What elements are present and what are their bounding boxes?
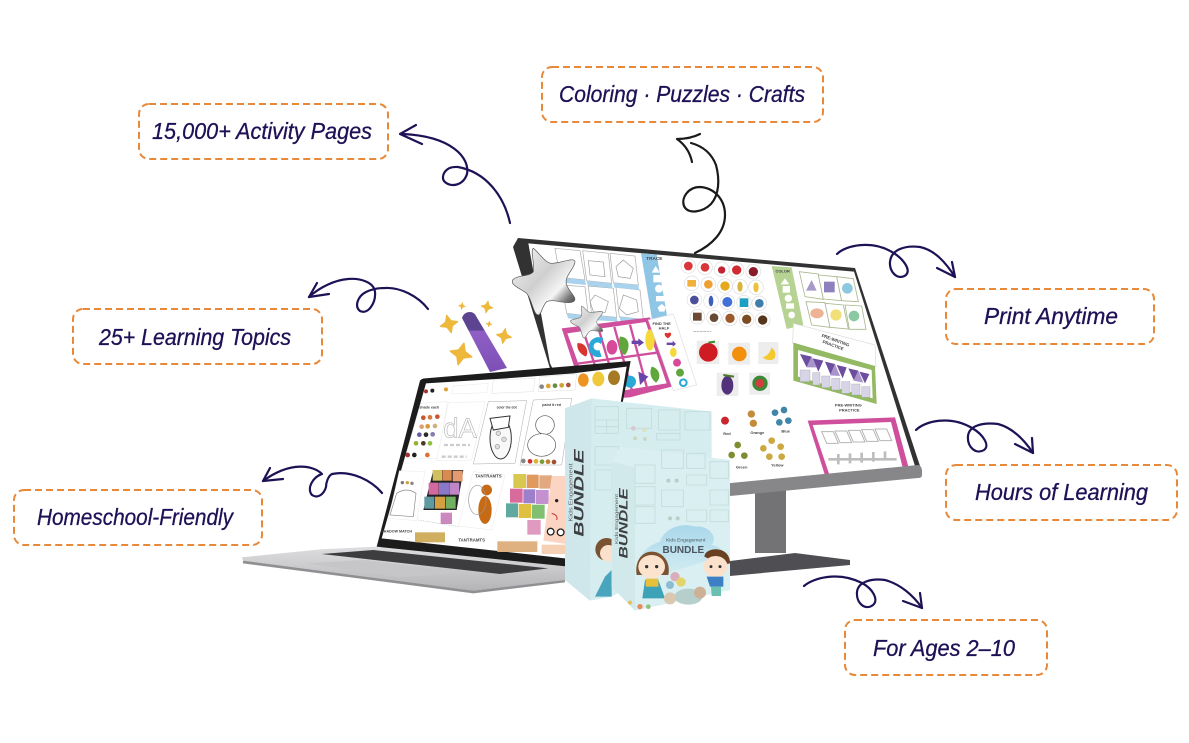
balloons and flowers xyxy=(628,572,706,609)
label: For Ages 2-10: For Ages 2–10 xyxy=(873,635,1015,661)
pre-writing practice sheet green: PRE-WRITING xyxy=(821,333,851,348)
cut-out fruit row xyxy=(693,332,778,396)
label: Print Anytime: Print Anytime xyxy=(984,303,1118,329)
label: 25+ Learning Topics xyxy=(73,309,322,364)
boy illustration xyxy=(704,549,730,596)
front box xyxy=(612,447,730,611)
label: Print Anytime xyxy=(946,289,1154,344)
label: 15,000+ Activity Pages: 15,000+ Activity Pages xyxy=(152,118,372,144)
laptop keyboard xyxy=(322,550,548,574)
monitor frame xyxy=(513,238,920,490)
find the half card: HALF xyxy=(659,325,670,330)
monitor xyxy=(513,238,922,576)
sticker circles xyxy=(681,259,770,327)
label: Coloring Puzzles Crafts: Coloring · Puzzles · Crafts xyxy=(559,81,805,107)
chrome star small xyxy=(571,306,603,338)
magic wand with sparkles xyxy=(438,300,513,372)
trace shapes strip xyxy=(641,253,668,327)
pink face worksheet xyxy=(543,476,568,544)
letter tracing worksheet: dA xyxy=(443,412,478,443)
label: Homeschool-Friendly xyxy=(14,490,262,545)
back box BUNDLE spine title: BUNDLE xyxy=(571,448,587,537)
pre-writing practice sheet pink: PRE-WRITING xyxy=(835,403,862,408)
bottom row worksheets: TANTRAMTS xyxy=(458,538,485,543)
teddy colouring worksheet xyxy=(458,472,505,530)
counting bugs with colour labels: Yellow xyxy=(771,463,784,468)
second faces grid worksheet xyxy=(506,474,552,535)
laptop lid xyxy=(377,361,631,567)
label: Coloring Puzzles Crafts xyxy=(542,67,823,122)
back box xyxy=(565,398,712,601)
label: 25+ Learning Topics: 25+ Learning Topics xyxy=(98,324,291,350)
shape tracing cards xyxy=(555,248,644,324)
cloud with bundle title: Kids Engagement xyxy=(666,538,706,544)
curly arrow to 25+ Learning Topics xyxy=(309,279,428,312)
laptop xyxy=(242,361,631,593)
color shape cards xyxy=(799,272,866,329)
bottom row worksheets: SHADOW MATCH xyxy=(381,530,412,534)
curly arrow to Print Anytime xyxy=(837,245,955,277)
curly arrow to 15,000+ Activity Pages xyxy=(400,125,510,223)
cloud with bundle title xyxy=(642,525,723,577)
bear colouring worksheet: paint it red xyxy=(542,403,561,407)
curly arrow to For Ages 2-10 xyxy=(804,577,922,608)
chrome star large xyxy=(512,248,575,315)
row of partial worksheets xyxy=(424,370,620,394)
teddy colouring worksheet: TANTRAMTS xyxy=(475,473,502,478)
counting bugs with colour labels: Red xyxy=(723,431,731,436)
laptop screen content xyxy=(381,367,627,558)
label: 15,000+ Activity Pages xyxy=(139,104,388,159)
dots worksheet: shade each xyxy=(419,406,439,410)
faces emotion grid worksheet xyxy=(418,470,463,527)
monitor chin xyxy=(700,465,922,498)
color shapes strip: COLOR xyxy=(775,269,790,274)
cloud with bundle title: BUNDLE xyxy=(663,545,704,556)
laptop base xyxy=(242,547,568,593)
letter tracing worksheet xyxy=(437,402,485,461)
pre-writing practice sheet pink xyxy=(808,403,908,475)
counting bugs with colour labels: Green xyxy=(736,465,748,470)
counting bugs with colour labels: Orange xyxy=(750,430,765,435)
bottom row worksheets xyxy=(381,530,565,554)
find the half card xyxy=(648,314,697,391)
dots worksheet xyxy=(405,402,447,458)
front box spine title: BUNDLE xyxy=(616,487,630,558)
bear colouring worksheet xyxy=(520,398,572,465)
counting bugs with colour labels: Blue xyxy=(781,428,791,433)
counting bugs with colour labels xyxy=(721,407,792,470)
back box girl peek xyxy=(595,538,618,597)
pre-writing practice sheet pink: PRACTICE xyxy=(839,407,860,412)
pre-writing practice sheet green: PRACTICE xyxy=(822,339,845,351)
curly arrow to Coloring Puzzles Crafts xyxy=(677,134,725,253)
girl illustration xyxy=(636,552,669,598)
crocodile colouring worksheet xyxy=(473,401,527,464)
bear outline worksheet xyxy=(388,471,425,521)
monitor stand xyxy=(730,488,850,576)
product boxes xyxy=(565,398,730,611)
monitor screen xyxy=(528,243,915,483)
matching grid with pink frame xyxy=(562,317,672,400)
pre-writing practice sheet green xyxy=(793,323,877,404)
color shapes strip xyxy=(772,266,803,329)
curly arrow to Hours of Learning xyxy=(916,420,1033,453)
curly arrow to Homeschool-Friendly xyxy=(263,467,382,496)
label: Homeschool-Friendly: Homeschool-Friendly xyxy=(37,504,234,530)
front box small spine title: Kids Engagement xyxy=(614,493,619,544)
label: For Ages 2-10 xyxy=(845,620,1047,675)
find the half card: FIND THE xyxy=(652,321,671,326)
label: Hours of Learning xyxy=(946,465,1177,520)
label: Hours of Learning: Hours of Learning xyxy=(975,479,1148,505)
back box small spine title: Kids Engagement xyxy=(568,463,574,522)
crocodile colouring worksheet: color the dot xyxy=(497,405,518,409)
trace shapes strip: TRACE xyxy=(646,256,662,261)
